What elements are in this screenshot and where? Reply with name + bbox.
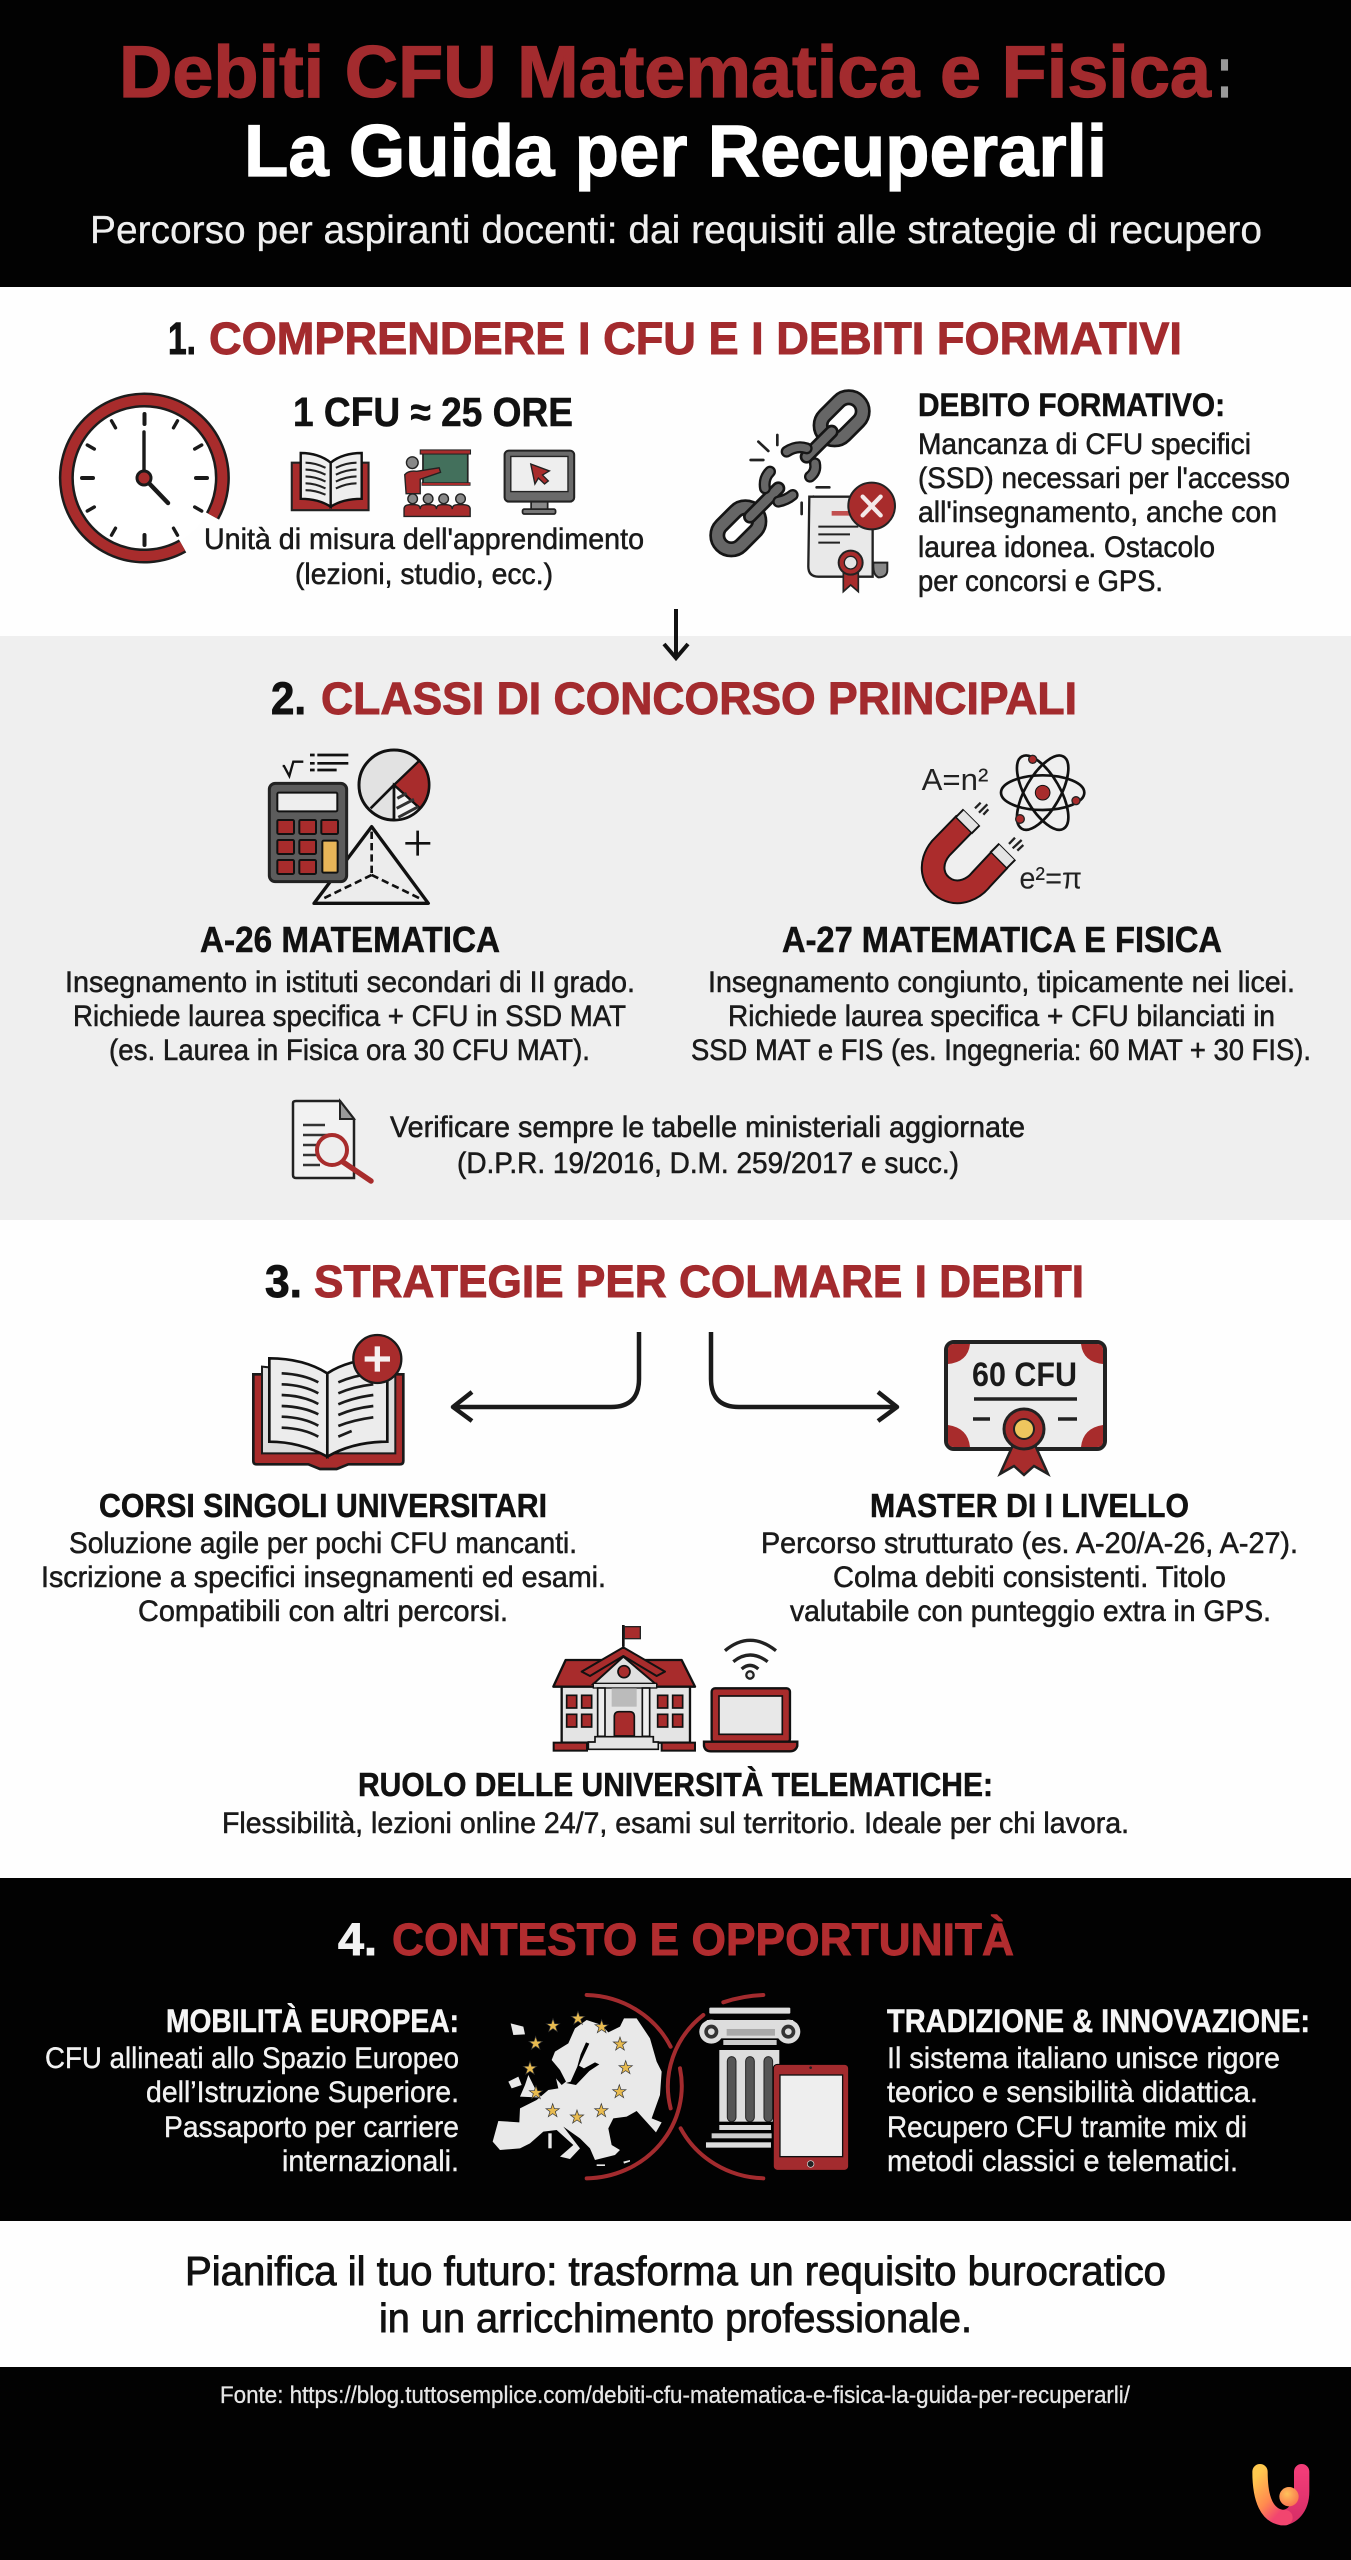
text: debito formativo: (SSD) necessari per l'accesso	[918, 462, 1290, 495]
text block: master di I livello: Colma debiti consistenti. Titolo	[833, 1561, 1226, 1594]
panel: section 3 strategie	[0, 1220, 1351, 1878]
heading: section 4: 4.	[338, 1914, 377, 1965]
text: debito formativo: Mancanza di CFU specifici	[918, 428, 1251, 461]
icon: physics atom, magnet and formulas	[922, 748, 1084, 895]
heading: section 1: COMPRENDERE I CFU E I DEBITI FORMATIVI	[209, 313, 1182, 364]
text: debito formativo: DEBITO FORMATIVO:	[918, 387, 1225, 423]
text: unita di misura	[204, 523, 644, 591]
icon: 60 CFU certificate	[946, 1342, 1105, 1475]
text block: A-26 matematica: (es. Laurea in Fisica ora 30 CFU MAT).	[109, 1034, 590, 1067]
arrow: left branch	[453, 1332, 639, 1421]
icon: broken chain and document	[711, 391, 895, 592]
text block: master di I livello: Percorso strutturato (es. A-20/A-26, A-27).	[761, 1527, 1298, 1560]
icon: physics atom, magnet and formulas: A=n²	[922, 763, 988, 797]
text block: A-27 matematica e fisica: Insegnamento congiunto, tipicamente nei licei.	[708, 966, 1295, 999]
text block: A-26 matematica: A-26 MATEMATICA	[200, 919, 500, 960]
heading: section 1: 1.	[168, 313, 196, 364]
heading: section 2: 2.	[271, 673, 306, 724]
text block: A-26 matematica: Richiede laurea specifica + CFU in SSD MAT	[73, 1000, 626, 1033]
text: debito formativo: laurea idonea. Ostacolo	[918, 531, 1215, 564]
title: Debiti CFU Matematica e Fisica	[119, 32, 1212, 113]
panel: section 1 comprendere i CFU	[0, 287, 1351, 636]
text block: A-27 matematica e fisica: A-27 MATEMATICA E FISICA	[782, 919, 1222, 960]
text: closing statement: Pianifica il tuo futuro: trasforma un requisito burocratico	[185, 2248, 1166, 2294]
text block: mobilita europea	[45, 2003, 459, 2178]
icon: red arcs	[587, 1995, 763, 2178]
icon: greek column	[699, 2008, 800, 2148]
panel: section 4 contesto	[0, 1878, 1351, 2221]
text block: corsi singoli: Iscrizione a specifici insegnamenti ed esami.	[41, 1561, 606, 1594]
arrow: right branch	[711, 1332, 897, 1421]
text block: A-27 matematica e fisica: SSD MAT e FIS (es. Ingegneria: 60 MAT + 30 FIS).	[691, 1034, 1311, 1067]
text block: master di I livello: MASTER DI I LIVELLO	[870, 1487, 1189, 1524]
heading: section 3: 3.	[265, 1256, 302, 1307]
text block: corsi singoli: Compatibili con altri percorsi.	[138, 1595, 508, 1628]
icon: monitor with cursor	[505, 451, 574, 514]
text block: corsi singoli: Soluzione agile per pochi CFU mancanti.	[69, 1527, 577, 1560]
icon: math calculator, pie chart and pyramid	[269, 750, 430, 903]
title	[119, 32, 1232, 192]
panel: footer	[0, 2367, 1351, 2560]
text block: tradizione e innovazione: TRADIZIONE & INNOVAZIONE:	[887, 2003, 1310, 2039]
text block: mobilita europea: MOBILITÀ EUROPEA:	[166, 2003, 459, 2039]
text block: A-26 matematica	[65, 919, 635, 1067]
icon: physics atom, magnet and formulas: e²=π	[1019, 861, 1082, 895]
text block: corsi singoli: CORSI SINGOLI UNIVERSITARI	[99, 1487, 547, 1524]
text block: corsi singoli	[41, 1487, 606, 1628]
text: debito formativo: all'insegnamento, anche con	[918, 496, 1277, 529]
icon: open book	[292, 453, 369, 510]
text: source: Fonte: https://blog.tuttosemplice.com/debiti-cfu-matematica-e-fisica-la-guida-per-recuperarli/	[220, 2382, 1130, 2409]
heading: section 4: CONTESTO E OPPORTUNITÀ	[392, 1914, 1014, 1965]
text: closing statement	[185, 2248, 1166, 2341]
icon: logo	[1260, 2472, 1302, 2518]
text: debito formativo: per concorsi e GPS.	[918, 565, 1163, 598]
icon: europe map with stars	[493, 2011, 662, 2166]
text block: mobilita europea: dell’Istruzione Superiore.	[146, 2076, 459, 2109]
text: debito formativo	[918, 387, 1290, 598]
text block: mobilita europea: CFU allineati allo Spazio Europeo	[45, 2042, 459, 2075]
heading: section 3: STRATEGIE PER COLMARE I DEBITI	[314, 1256, 1084, 1307]
panel: header	[0, 0, 1351, 287]
subtitle: Percorso per aspiranti docenti: dai requisiti alle strategie di recupero	[90, 209, 1262, 252]
title: La Guida per Recuperarli	[244, 111, 1107, 192]
text: unita di misura: (lezioni, studio, ecc.)	[295, 558, 553, 591]
panel: section 2 classi di concorso	[0, 636, 1351, 1220]
icon: university building	[553, 1625, 695, 1751]
text: verificare tabelle ministeriali: (D.P.R. 19/2016, D.M. 259/2017 e succ.)	[457, 1147, 959, 1180]
text block: mobilita europea: internazionali.	[282, 2145, 459, 2178]
text block: tradizione e innovazione: metodi classici e telematici.	[887, 2145, 1238, 2178]
text block: A-27 matematica e fisica	[691, 919, 1311, 1067]
heading: section 2: CLASSI DI CONCORSO PRINCIPALI	[321, 673, 1077, 724]
icon: open book with plus	[253, 1335, 403, 1469]
text block: master di I livello	[761, 1487, 1298, 1628]
text block: universita telematiche: Flessibilità, lezioni online 24/7, esami sul territorio. Ideale per chi lavora.	[222, 1807, 1129, 1840]
text: unita di misura: Unità di misura dell'apprendimento	[204, 523, 644, 556]
icon: tablet	[773, 2064, 849, 2170]
text block: tradizione e innovazione: Recupero CFU tramite mix di	[887, 2111, 1247, 2144]
title: :	[1217, 32, 1232, 113]
text block: mobilita europea: Passaporto per carriere	[164, 2111, 459, 2144]
icon: 60 CFU certificate: 60 CFU	[972, 1356, 1077, 1394]
text block: universita telematiche: RUOLO DELLE UNIVERSITÀ TELEMATICHE:	[358, 1766, 993, 1803]
panel: closing message	[0, 2221, 1351, 2367]
text block: master di I livello: valutabile con punteggio extra in GPS.	[790, 1595, 1271, 1628]
text block: tradizione e innovazione: Il sistema italiano unisce rigore	[887, 2042, 1280, 2075]
icon: teacher and classroom	[404, 450, 471, 516]
text block: tradizione e innovazione	[887, 2003, 1310, 2178]
text block: A-27 matematica e fisica: Richiede laurea specifica + CFU bilanciati in	[728, 1000, 1275, 1033]
text: verificare tabelle ministeriali	[390, 1111, 1025, 1180]
text: verificare tabelle ministeriali: Verificare sempre le tabelle ministeriali aggiornate	[390, 1111, 1025, 1144]
arrow: section 1 to section 2	[664, 609, 688, 658]
icon: laptop with wifi	[704, 1640, 797, 1751]
text: 1 CFU = 25 ore: 1 CFU ≈ 25 ORE	[293, 389, 573, 435]
text block: A-26 matematica: Insegnamento in istituti secondari di II grado.	[65, 966, 635, 999]
text: closing statement: in un arricchimento professionale.	[379, 2295, 972, 2341]
text block: universita telematiche	[222, 1766, 1129, 1840]
icon: clock	[66, 400, 222, 556]
icon: document with magnifier	[293, 1101, 371, 1181]
text block: tradizione e innovazione: teorico e sensibilità didattica.	[887, 2076, 1258, 2109]
